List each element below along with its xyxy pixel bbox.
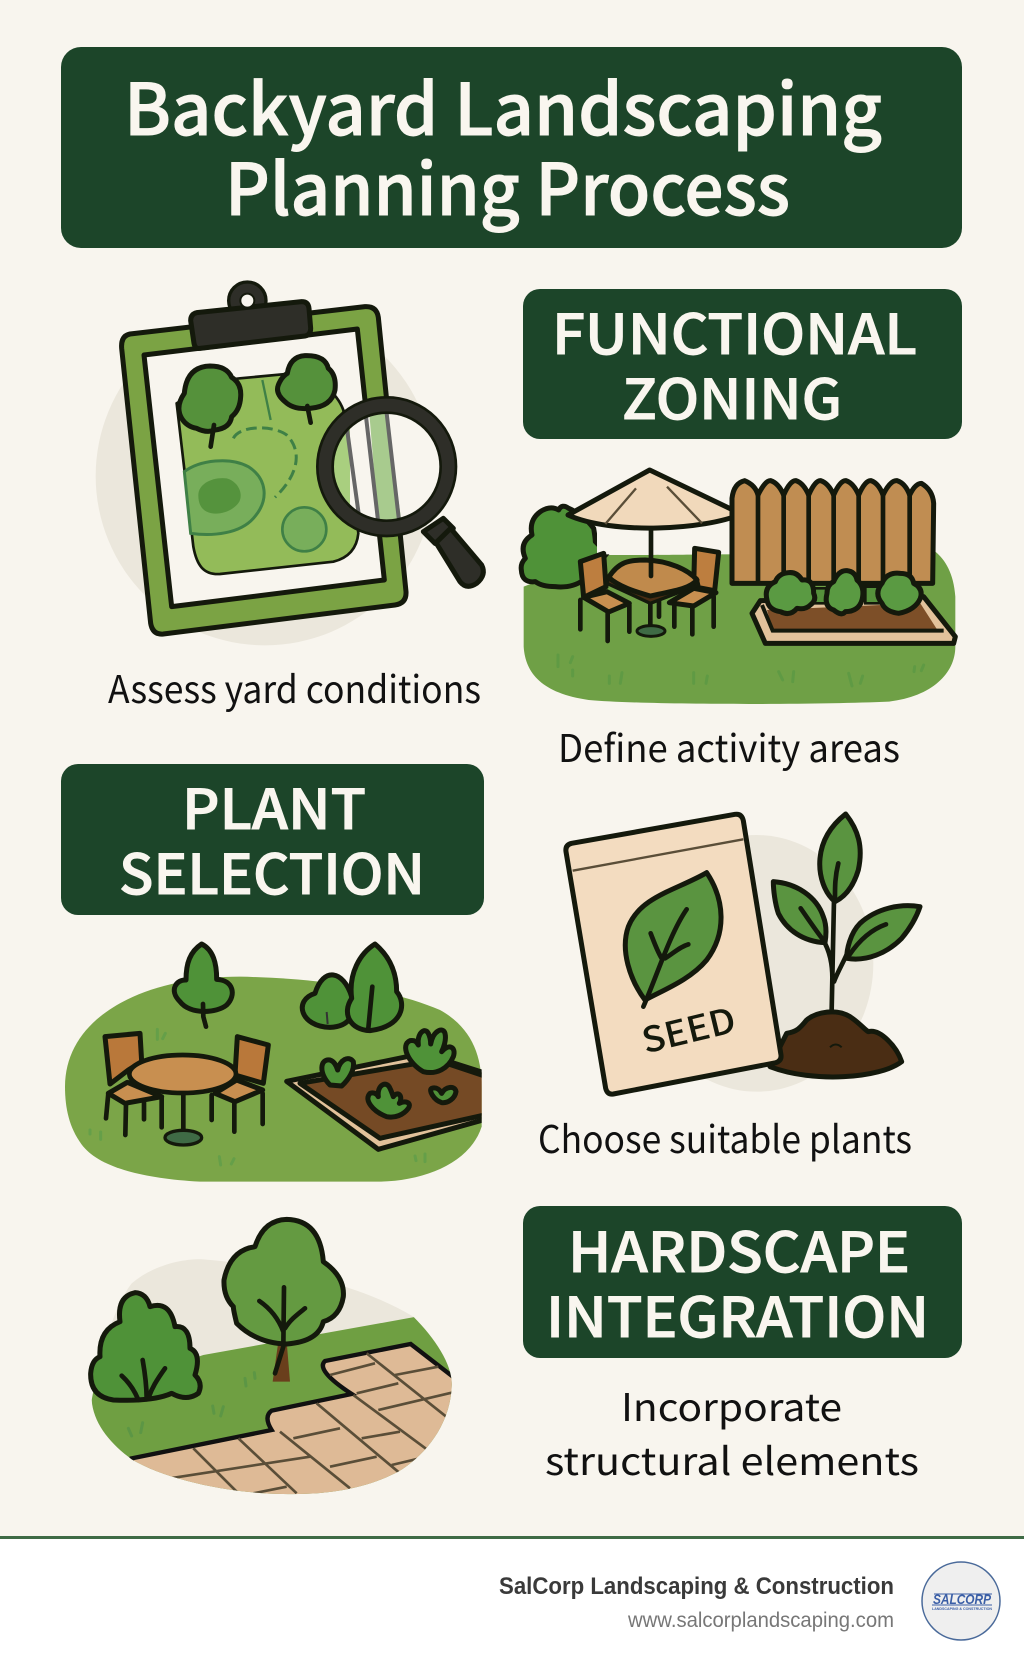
soil mound <box>770 1012 902 1077</box>
heading: plant selection: SELECTION <box>119 830 425 910</box>
tree <box>224 1219 343 1382</box>
grass tufts <box>90 1029 425 1165</box>
title banner <box>61 47 962 248</box>
caption: choose suitable plants: Choose suitable plants <box>538 1109 912 1164</box>
paper <box>144 329 384 607</box>
illustration: seed packet and seedling <box>566 814 920 1094</box>
lawn <box>92 1317 452 1494</box>
left chair <box>580 553 629 641</box>
background circle <box>640 835 873 1092</box>
yard map <box>177 373 358 574</box>
plants in bed <box>766 571 921 614</box>
heading: hardscape integration: INTEGRATION <box>546 1273 929 1353</box>
heading: plant selection <box>61 764 484 915</box>
company logo <box>922 1562 1000 1640</box>
leaf on packet <box>625 873 721 1007</box>
footer <box>0 1536 1024 1666</box>
company name: SalCorp Landscaping & Construction <box>499 1573 894 1600</box>
left tree <box>179 366 241 447</box>
heading: hardscape integration: HARDSCAPE <box>568 1208 910 1288</box>
right tree <box>277 356 335 423</box>
caption: incorporate structural elements <box>545 1377 919 1486</box>
table <box>607 560 699 636</box>
title banner: Backyard Landscaping <box>124 54 882 156</box>
magnifying glass <box>325 405 483 586</box>
shrub <box>91 1293 200 1400</box>
raised bed <box>752 597 955 643</box>
raised garden bed <box>287 1053 507 1149</box>
heading: hardscape integration <box>523 1206 962 1358</box>
ground blob with paving <box>92 1259 452 1494</box>
pond zone <box>282 507 326 551</box>
garden bed plants <box>322 1030 456 1117</box>
right chair <box>212 1037 268 1132</box>
background circle <box>96 307 434 645</box>
table <box>129 1055 236 1145</box>
paving joints <box>170 1353 452 1493</box>
clipboard frame <box>122 307 406 634</box>
fence <box>732 481 934 583</box>
company logo: LANDSCAPING & CONSTRUCTION <box>932 1607 992 1611</box>
umbrella <box>568 470 741 576</box>
packet label: SEED <box>636 992 740 1064</box>
illustration: clipboard with yard plan and magnifying glass <box>96 282 483 645</box>
shrub pair <box>302 944 402 1031</box>
heading: functional zoning: FUNCTIONAL <box>552 290 917 370</box>
garden bed zone <box>198 478 241 514</box>
caption: define activity areas: Define activity areas <box>558 718 900 773</box>
lawn <box>65 977 482 1182</box>
title banner: Planning Process <box>225 134 790 236</box>
caption: assess yard conditions: Assess yard conditions <box>108 659 481 714</box>
shade under umbrella <box>597 528 730 554</box>
seed packet <box>566 814 781 1094</box>
dashed path <box>233 428 296 497</box>
lawn zone <box>184 461 264 535</box>
left tree <box>174 944 232 1027</box>
paving <box>130 1342 452 1494</box>
boundary line <box>262 380 271 420</box>
website: www.salcorplandscaping.com <box>627 1609 894 1632</box>
grass tufts <box>558 655 924 686</box>
illustration: planted yard with table and garden bed <box>65 944 507 1182</box>
illustration: patio, fence and raised bed <box>521 470 955 704</box>
right chair <box>669 548 719 634</box>
heading: plant selection: PLANT <box>182 765 366 845</box>
lawn <box>524 552 955 704</box>
grass tufts <box>128 1373 255 1436</box>
heading: functional zoning: ZONING <box>622 355 842 435</box>
left chair <box>105 1033 162 1135</box>
heading: functional zoning <box>523 289 962 439</box>
illustration: trees, lawn and paved patio <box>88 1216 452 1494</box>
seedling <box>773 814 920 1010</box>
clip <box>191 282 311 348</box>
caption: incorporate structural elements: Incorporate <box>621 1377 842 1432</box>
caption: incorporate structural elements: structural elements <box>545 1431 919 1486</box>
company logo: SALCORP <box>933 1591 992 1607</box>
shrub <box>521 506 607 587</box>
